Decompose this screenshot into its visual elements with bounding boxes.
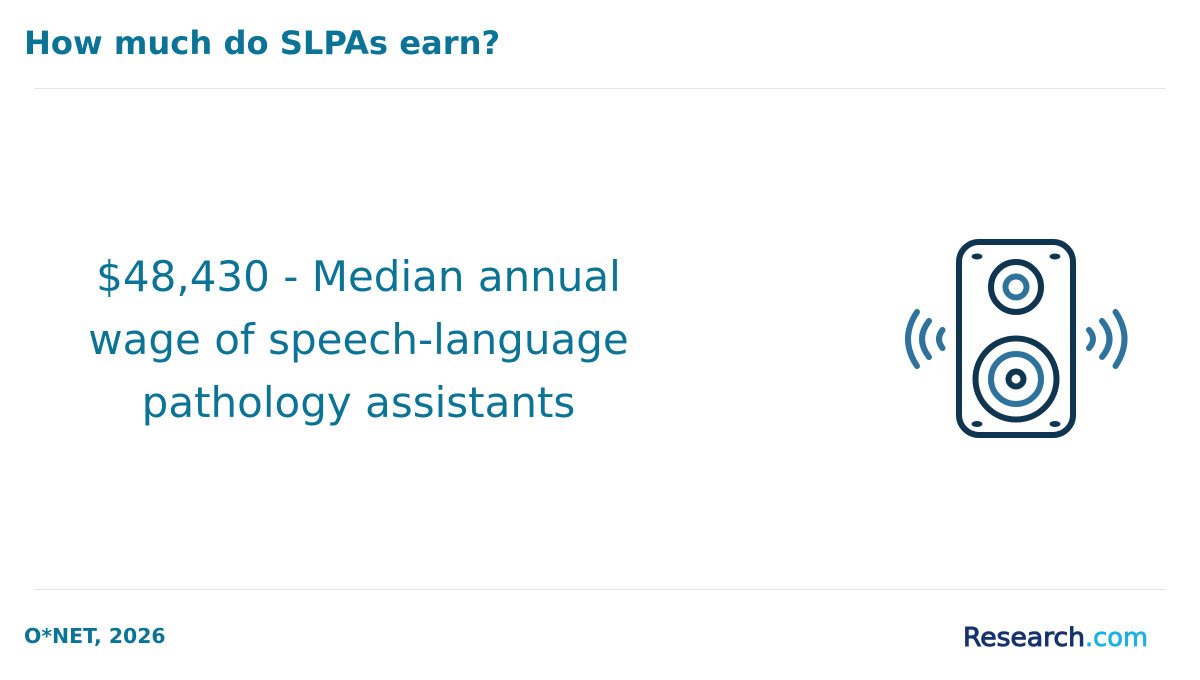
main statistic text: wage of speech-language <box>88 315 629 364</box>
logo: Research.com <box>963 623 1148 653</box>
speaker cabinet <box>959 242 1073 435</box>
source note: O*NET, 2026 <box>24 624 166 648</box>
main statistic text: $48,430 - Median annual <box>96 252 621 301</box>
sound waves right <box>1089 312 1124 366</box>
title: How much do SLPAs earn? <box>24 24 500 62</box>
screw holes <box>972 254 1060 427</box>
main statistic text: pathology assistants <box>142 378 575 427</box>
main statistic text <box>88 252 629 427</box>
sound waves left <box>908 312 942 366</box>
logo: Research.com: Research <box>963 623 1085 653</box>
speaker cones <box>991 276 1041 404</box>
logo: Research.com: .com <box>1085 623 1148 653</box>
